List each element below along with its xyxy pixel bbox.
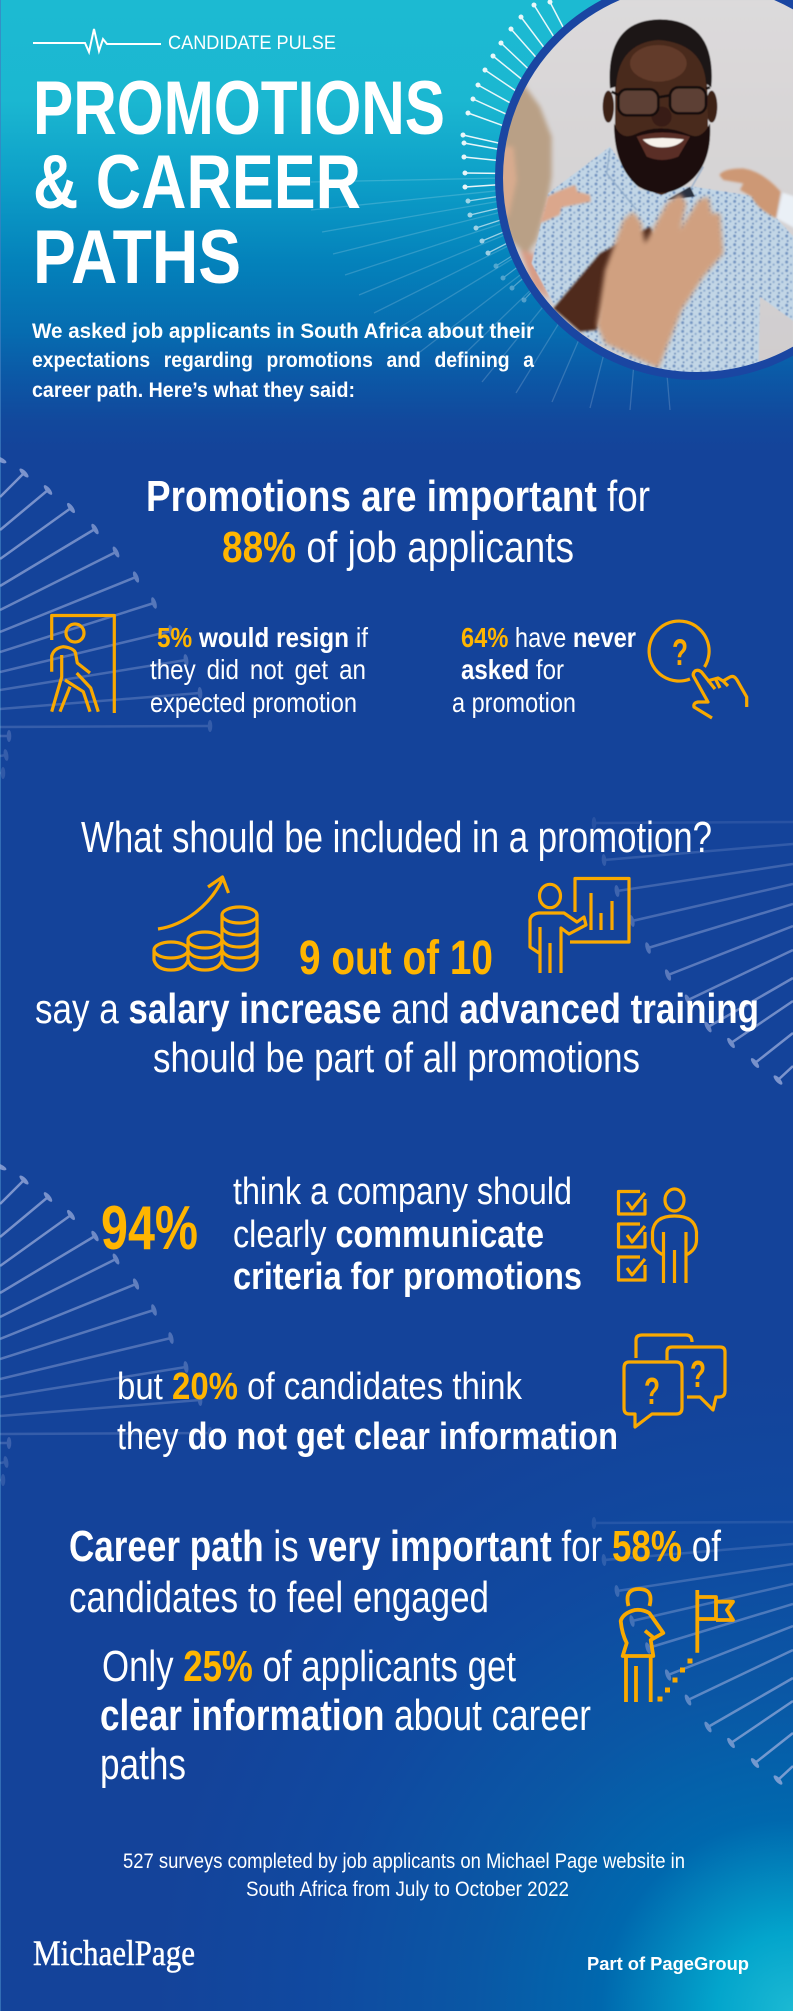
photo detail: blurred hand in front [597, 193, 723, 368]
logo: Michael Page: MichaelPage [33, 1933, 195, 1973]
dotted path to the flag [658, 1658, 692, 1702]
ray burst right, upper [594, 822, 793, 1080]
text: salary increase and advanced training [35, 985, 759, 1081]
icon: rising arrow over coin stacks [154, 877, 257, 970]
photo detail: shirt [532, 147, 793, 375]
text: clearly communicate criteria [233, 1171, 582, 1298]
photo detail: head and hair [603, 19, 717, 195]
ray burst right, lower [594, 1522, 793, 1780]
text: only 25% of applicants: paths [100, 1740, 186, 1789]
stat: 5% would resign: they did not get an [150, 654, 366, 685]
intro paragraph: career path. Here’s what they said: [32, 379, 355, 402]
icon: speech bubbles with question marks: ? [690, 1354, 706, 1396]
text: career path importance [69, 1522, 722, 1622]
intro paragraph: We asked job applicants in South Africa about their [32, 320, 534, 343]
text: career path importance: candidates to feel engaged [69, 1573, 489, 1622]
stat: 64% have never asked: asked for [461, 654, 564, 685]
icon: person walking out of a door [52, 616, 114, 713]
text: career path importance: Career path is very important for 58% of [69, 1522, 722, 1571]
footnote: South Africa from July to October 2022 [246, 1878, 569, 1901]
icon: checklist and person [618, 1189, 696, 1283]
title: PATHS [33, 215, 241, 300]
text: salary increase and advanced training: should be part of all promotions [153, 1034, 640, 1081]
text: only 25% of applicants: Only 25% of applicants get [102, 1642, 516, 1691]
ray burst left, upper [0, 460, 210, 773]
text: clearly communicate criteria: criteria for promotions [233, 1256, 582, 1298]
text: clearly communicate criteria: think a company should [233, 1171, 572, 1213]
brand line: heartbeat and CANDIDATE PULSE [33, 29, 336, 54]
text: clearly communicate criteria: clearly communicate [233, 1214, 544, 1256]
stat: 64% have never asked [452, 622, 636, 718]
photo ring [499, 0, 793, 376]
stat: 5% would resign [150, 622, 368, 718]
icon: question mark with pointing hand: ? [672, 632, 688, 673]
ray burst left, lower [0, 1167, 210, 1480]
candidate pulse label: CANDIDATE PULSE [168, 33, 336, 54]
icon: presenter with chart [530, 878, 629, 973]
heading: promotions are important: Promotions are important for [146, 472, 650, 521]
stat: 64% have never asked: a promotion [452, 687, 576, 718]
text: only 25% of applicants: clear information about career [100, 1691, 591, 1740]
photo detail: blonde hair and face edge [497, 82, 552, 300]
icon: speech bubbles with question marks: ? [644, 1371, 660, 1413]
icon: heartbeat line [33, 29, 161, 52]
title: PROMOTIONS [33, 66, 445, 151]
text: 20% do not get clear information: but 20% of candidates think [117, 1366, 523, 1408]
footnote [123, 1850, 685, 1901]
text: 20% do not get clear information: they do not get clear information [117, 1416, 618, 1458]
intro paragraph [32, 320, 534, 402]
text: 20% do not get clear information [117, 1366, 618, 1458]
heading: promotions are important: 88% of job applicants [222, 523, 574, 572]
icon: person looking at flag with dotted path [621, 1589, 733, 1702]
heading: promotions are important [146, 472, 650, 572]
stat: 64% have never asked: 64% have never [461, 622, 636, 653]
icon: speech bubbles with question marks [624, 1335, 725, 1427]
part of PageGroup: Part of PageGroup [587, 1954, 749, 1974]
stat: 5% would resign: 5% would resign if [157, 622, 368, 653]
photo: smiling man in patterned shirt, circular crop [490, 0, 793, 400]
photo detail: hands on shoulders [540, 168, 793, 228]
footnote: 527 surveys completed by job applicants on Michael Page website in [123, 1850, 685, 1873]
photo detail: dark arm behind hand [553, 227, 657, 332]
title: & CAREER [33, 140, 361, 225]
stat: 94%: 94% [101, 1194, 198, 1263]
stat: 9 out of 10: 9 out of 10 [299, 932, 493, 985]
stat: 5% would resign: expected promotion [150, 687, 357, 718]
radial burst behind photo [311, 2, 670, 410]
title [33, 66, 445, 300]
icon: question mark with pointing hand [649, 621, 747, 718]
text: only 25% of applicants [100, 1642, 591, 1789]
intro paragraph: expectations regarding promotions and defining a [32, 349, 534, 372]
